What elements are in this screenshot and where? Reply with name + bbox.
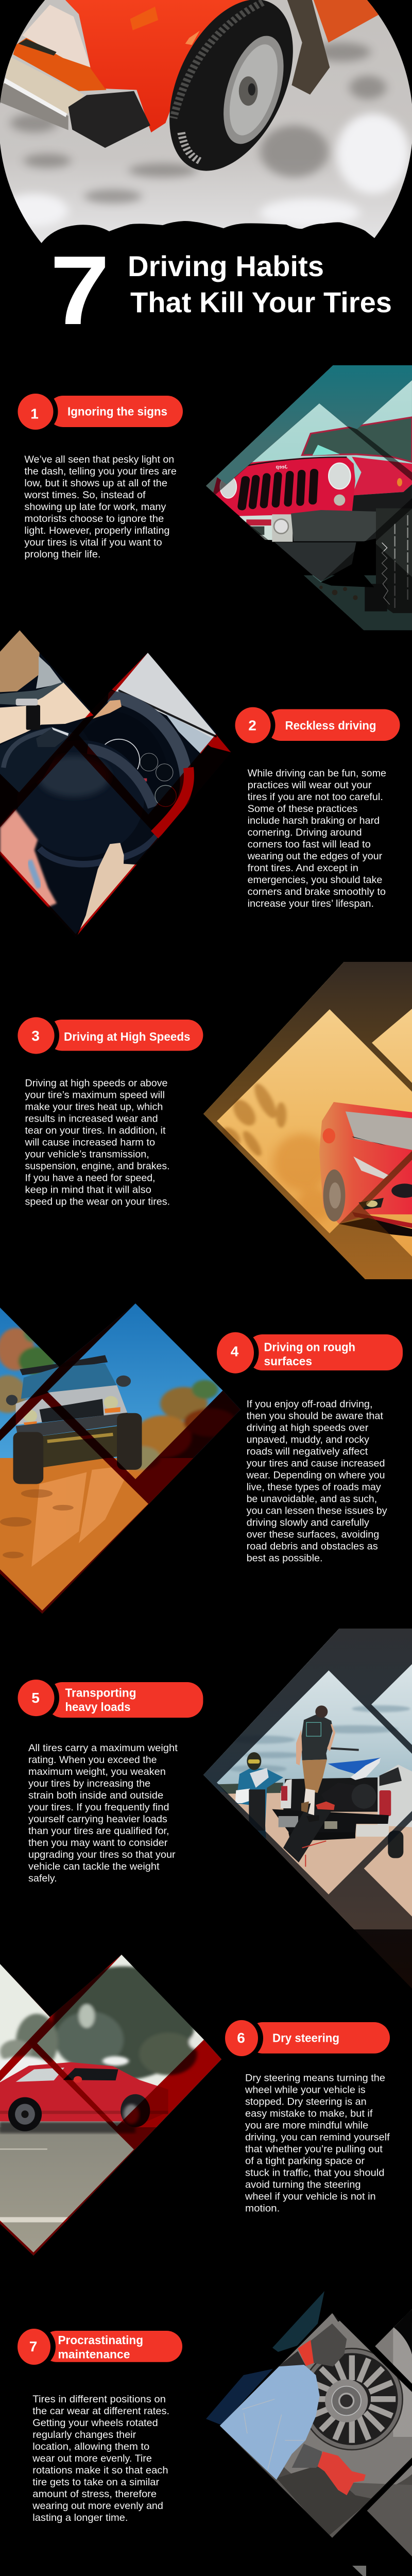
number badge and heading: Procrastinating maintenance: maintenance xyxy=(58,2347,130,2361)
body text: If you enjoy off-road driving, xyxy=(247,1399,373,1410)
panel: habit 6 xyxy=(0,1945,390,2260)
number badge and heading: Dry steering: 6 xyxy=(237,2030,245,2046)
photo: pickup truck with dirt bikes in diamond collage xyxy=(197,1623,412,1989)
body text xyxy=(247,768,386,909)
body text: your vehicle’s transmission, xyxy=(25,1149,149,1160)
number badge and heading: Ignoring the signs xyxy=(13,389,183,434)
photo: red jeep in diamond collage: Jeep xyxy=(276,464,287,470)
body text: light. However, properly inflating xyxy=(24,526,170,536)
panel: habit 7 xyxy=(12,2282,412,2576)
body text: Some of these practices xyxy=(248,804,357,815)
body text: be unavoidable, and as such, xyxy=(247,1494,377,1504)
body text: speed up the wear on your tires. xyxy=(25,1196,170,1208)
body text: showing up late for work, many xyxy=(24,502,166,513)
number badge and heading: Transporting heavy loads: Transporting xyxy=(65,1686,136,1700)
body text: your tires. If you frequently find xyxy=(28,1802,169,1813)
number badge and heading: Reckless driving: 2 xyxy=(248,717,256,734)
body text: vehicle can tackle the weight xyxy=(28,1861,160,1872)
number badge and heading: Ignoring the signs: Ignoring the signs xyxy=(67,405,167,418)
panel: habit 4 xyxy=(0,1302,403,1619)
body text: results in increased wear and xyxy=(25,1114,158,1124)
body text: easy mistake to make, but if xyxy=(245,2108,373,2120)
body text xyxy=(28,1743,178,1884)
body text: live, these types of roads may xyxy=(247,1482,381,1493)
body text: upgrading your tires so that your xyxy=(28,1850,176,1860)
body text xyxy=(32,2394,169,2523)
body text: amount of stress, therefore xyxy=(32,2489,157,2500)
body text: wearing out the edges of your xyxy=(247,851,383,862)
body text: Dry steering means turning the xyxy=(245,2073,385,2083)
number badge and heading: Driving on rough surfaces xyxy=(212,1329,403,1376)
body text: lasting a longer time. xyxy=(32,2513,128,2523)
body text: corners and brake smoothly to xyxy=(248,887,386,897)
panel: habit 1 xyxy=(13,361,412,640)
body text: roads will negatively affect xyxy=(247,1446,368,1457)
body text: low, but it shows up at all of the xyxy=(24,478,167,489)
body text: motion. xyxy=(245,2203,280,2214)
body text: stopped. Dry steering is an xyxy=(245,2097,367,2107)
number badge and heading: Reckless driving: Reckless driving xyxy=(285,719,376,732)
body text: emergencies, you should take xyxy=(248,875,382,886)
body text: then you should be aware that xyxy=(247,1411,384,1421)
body text: While driving can be fun, some xyxy=(248,768,386,779)
body text: cornering. Driving around xyxy=(248,827,362,838)
body text: All tires carry a maximum weight xyxy=(28,1743,178,1754)
number badge and heading: Driving on rough surfaces: Driving on rough xyxy=(264,1341,355,1354)
number badge and heading: Dry steering xyxy=(220,2016,390,2060)
body text: your tires and cause increased xyxy=(247,1458,385,1469)
title: Driving Habits xyxy=(128,250,324,282)
title: 7 xyxy=(50,236,110,345)
body text: Getting your wheels rotated xyxy=(32,2418,158,2429)
body text: maximum weight, you weaken xyxy=(28,1767,166,1777)
body text: road debris and obstacles as xyxy=(247,1541,378,1552)
panel: habit 2 xyxy=(0,629,400,938)
body text: We’ve all seen that pesky light on xyxy=(24,454,174,465)
body text: your tire’s maximum speed will xyxy=(25,1090,165,1100)
number badge and heading: Reckless driving xyxy=(231,703,400,748)
number badge and heading: Driving at High Speeds: Driving at High Speeds xyxy=(64,1030,191,1043)
body text: wheel while your vehicle is xyxy=(245,2084,366,2096)
body text: strain both inside and outside xyxy=(28,1790,163,1801)
photo: red muscle car burnout in diamond collage xyxy=(0,1955,221,2256)
body text: increase your tires’ lifespan. xyxy=(248,899,374,909)
photo: mechanic fitting wheel in diamond collage xyxy=(201,2282,412,2576)
body text: tires if you are not too careful. xyxy=(248,792,383,803)
body text: driving at high speeds over xyxy=(247,1422,369,1433)
body text: suspension, engine, and brakes. xyxy=(25,1161,170,1172)
body text: best as possible. xyxy=(247,1553,323,1564)
number badge and heading: Transporting heavy loads: heavy loads xyxy=(65,1700,131,1714)
body text: regularly changes their xyxy=(32,2430,136,2441)
body text: you can lessen these issues by xyxy=(247,1505,387,1516)
number badge and heading: Procrastinating maintenance: Procrastinating xyxy=(58,2333,143,2347)
number badge and heading: Transporting heavy loads: 5 xyxy=(31,1690,40,1706)
number badge and heading: Procrastinating maintenance xyxy=(12,2325,182,2368)
body text: rotations make it so that each xyxy=(32,2465,168,2476)
photo: red jeep in diamond collage xyxy=(201,361,412,640)
body text: your tires by increasing the xyxy=(28,1778,150,1789)
body text xyxy=(245,2073,390,2214)
body text: stuck in traffic, that you should xyxy=(245,2168,384,2178)
panel: habit 3 xyxy=(13,959,412,1290)
hero photo: red car tire on snow xyxy=(0,0,412,265)
body text: avoid turning the steering xyxy=(245,2179,360,2191)
body text: safely. xyxy=(28,1873,57,1884)
body text: wear. Depending on where you xyxy=(246,1470,385,1481)
body text: front tires. And except in xyxy=(248,863,358,874)
body text: unpaved, muddy, and rocky xyxy=(247,1434,369,1445)
title xyxy=(50,236,392,345)
body text: Driving at high speeds or above xyxy=(25,1078,168,1089)
number badge and heading: Dry steering: Dry steering xyxy=(272,2031,339,2045)
body text: location, allowing them to xyxy=(32,2442,149,2452)
body text: you are more mindful while xyxy=(245,2121,368,2131)
body text: corners too fast will lead to xyxy=(248,839,371,850)
body text: over these surfaces, avoiding xyxy=(247,1529,379,1540)
photo: off-road jeep in diamond collage xyxy=(0,1302,248,1619)
body text: motorists choose to ignore the xyxy=(24,514,164,524)
body text: than your tires are qualified for, xyxy=(28,1826,169,1837)
body text: wear out more evenly. Tire xyxy=(32,2453,152,2464)
body text: driving, you can remind yourself xyxy=(245,2132,390,2143)
panel: habit 5 xyxy=(13,1623,412,1989)
body text: the dash, telling you your tires are xyxy=(24,466,177,477)
number badge and heading: Driving on rough surfaces: 4 xyxy=(231,1344,239,1360)
body text: of a tight parking space or xyxy=(245,2156,365,2167)
number badge and heading: Transporting heavy loads xyxy=(13,1675,203,1721)
body text xyxy=(24,1078,170,1208)
body text: then you may want to consider xyxy=(28,1838,168,1849)
title: That Kill Your Tires xyxy=(130,286,392,318)
number badge and heading: Ignoring the signs: 1 xyxy=(30,406,39,421)
body text: wheel if your vehicle is not in xyxy=(245,2192,376,2202)
body text: If you have a need for speed, xyxy=(25,1173,156,1184)
number badge and heading: Procrastinating maintenance: 7 xyxy=(29,2338,37,2354)
photo: hands on steering wheel in diamond collage xyxy=(0,629,239,938)
body text: your tires is vital if you want to xyxy=(24,537,162,548)
body text: tire gets to take on a similar xyxy=(32,2477,160,2488)
body text: tear on your tires. In addition, it xyxy=(25,1125,166,1137)
body text: wearing out more evenly and xyxy=(32,2501,163,2512)
body text: yourself carrying heavier loads xyxy=(28,1814,167,1825)
body text: Tires in different positions on xyxy=(32,2394,166,2405)
number badge and heading: Driving at High Speeds: 3 xyxy=(31,1028,40,1044)
body text: that whether you’re pulling out xyxy=(245,2144,383,2155)
number badge and heading: Driving at High Speeds xyxy=(13,1012,203,1059)
number badge and heading: Driving on rough surfaces: surfaces xyxy=(264,1354,312,1368)
hero scalloped lower edge xyxy=(0,221,412,289)
body text: worst times. So, instead of xyxy=(24,490,146,501)
body text: practices will wear out your xyxy=(248,780,372,791)
photo: red car in dust in diamond collage xyxy=(195,959,412,1290)
body text: keep in mind that it will also xyxy=(25,1185,151,1195)
body text: driving slowly and carefully xyxy=(247,1517,369,1528)
body text: include harsh braking or hard xyxy=(248,816,380,826)
body text: will cause increased harm to xyxy=(24,1138,155,1148)
body text xyxy=(246,1399,387,1564)
body text: prolong their life. xyxy=(24,549,100,560)
body text: make your tires heat up, which xyxy=(25,1101,163,1113)
body text: the car wear at different rates. xyxy=(32,2406,169,2417)
body text: rating. When you exceed the xyxy=(28,1755,157,1766)
body text xyxy=(24,454,177,560)
